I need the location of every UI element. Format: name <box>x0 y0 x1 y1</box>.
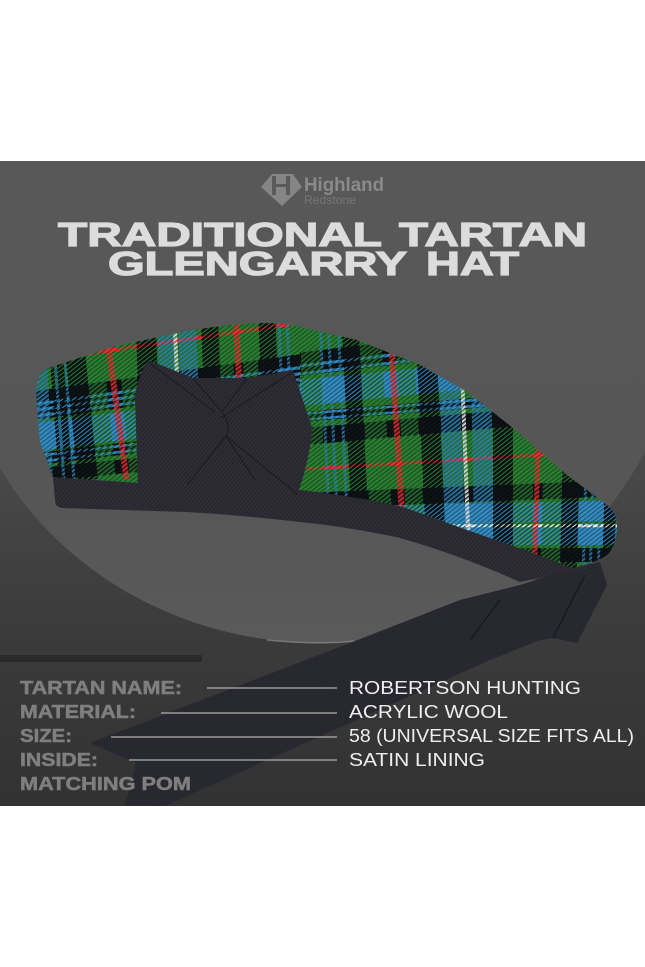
title <box>58 217 587 282</box>
columns <box>301 327 323 493</box>
icon: diamond logo mark <box>261 174 302 206</box>
hat bow <box>135 360 312 495</box>
ribbon tail <box>90 562 607 806</box>
connector lines <box>111 688 337 760</box>
value: material: ACRYLIC WOOL <box>349 702 508 722</box>
infographic canvas <box>0 161 645 806</box>
logo: Highland Redstone <box>261 174 384 207</box>
label: size: SIZE: <box>20 726 72 746</box>
divider bar <box>0 655 202 662</box>
panel: dark background <box>0 161 645 806</box>
label: tartan name: TARTAN NAME: <box>20 678 182 698</box>
label: inside: INSIDE: <box>20 750 98 770</box>
logo wordmark: Highland <box>304 175 384 196</box>
label: matching pom: MATCHING POM <box>20 774 191 794</box>
title word: tartan: TARTAN <box>399 217 587 254</box>
hat brim band <box>53 477 600 582</box>
specification labels <box>20 678 191 794</box>
tartan: right section <box>300 327 617 568</box>
tartan: left section <box>36 323 300 490</box>
title word: hat: HAT <box>426 245 519 282</box>
logo sub-wordmark: Redstone <box>304 193 356 207</box>
value: tartan name: ROBERTSON HUNTING <box>349 678 581 698</box>
hat crown: tartan fabric <box>36 323 617 568</box>
value: inside: SATIN LINING <box>349 750 485 770</box>
value: size: 58 (UNIVERSAL SIZE FITS ALL) <box>349 726 634 746</box>
title word: traditional: TRADITIONAL <box>58 217 382 254</box>
label: material: MATERIAL: <box>20 702 136 722</box>
columns <box>36 320 44 480</box>
specification values <box>349 678 634 770</box>
panel: grey circular backdrop <box>0 161 645 643</box>
circle bottom highlight <box>267 640 354 643</box>
title word: glengarry: GLENGARRY <box>108 245 407 282</box>
